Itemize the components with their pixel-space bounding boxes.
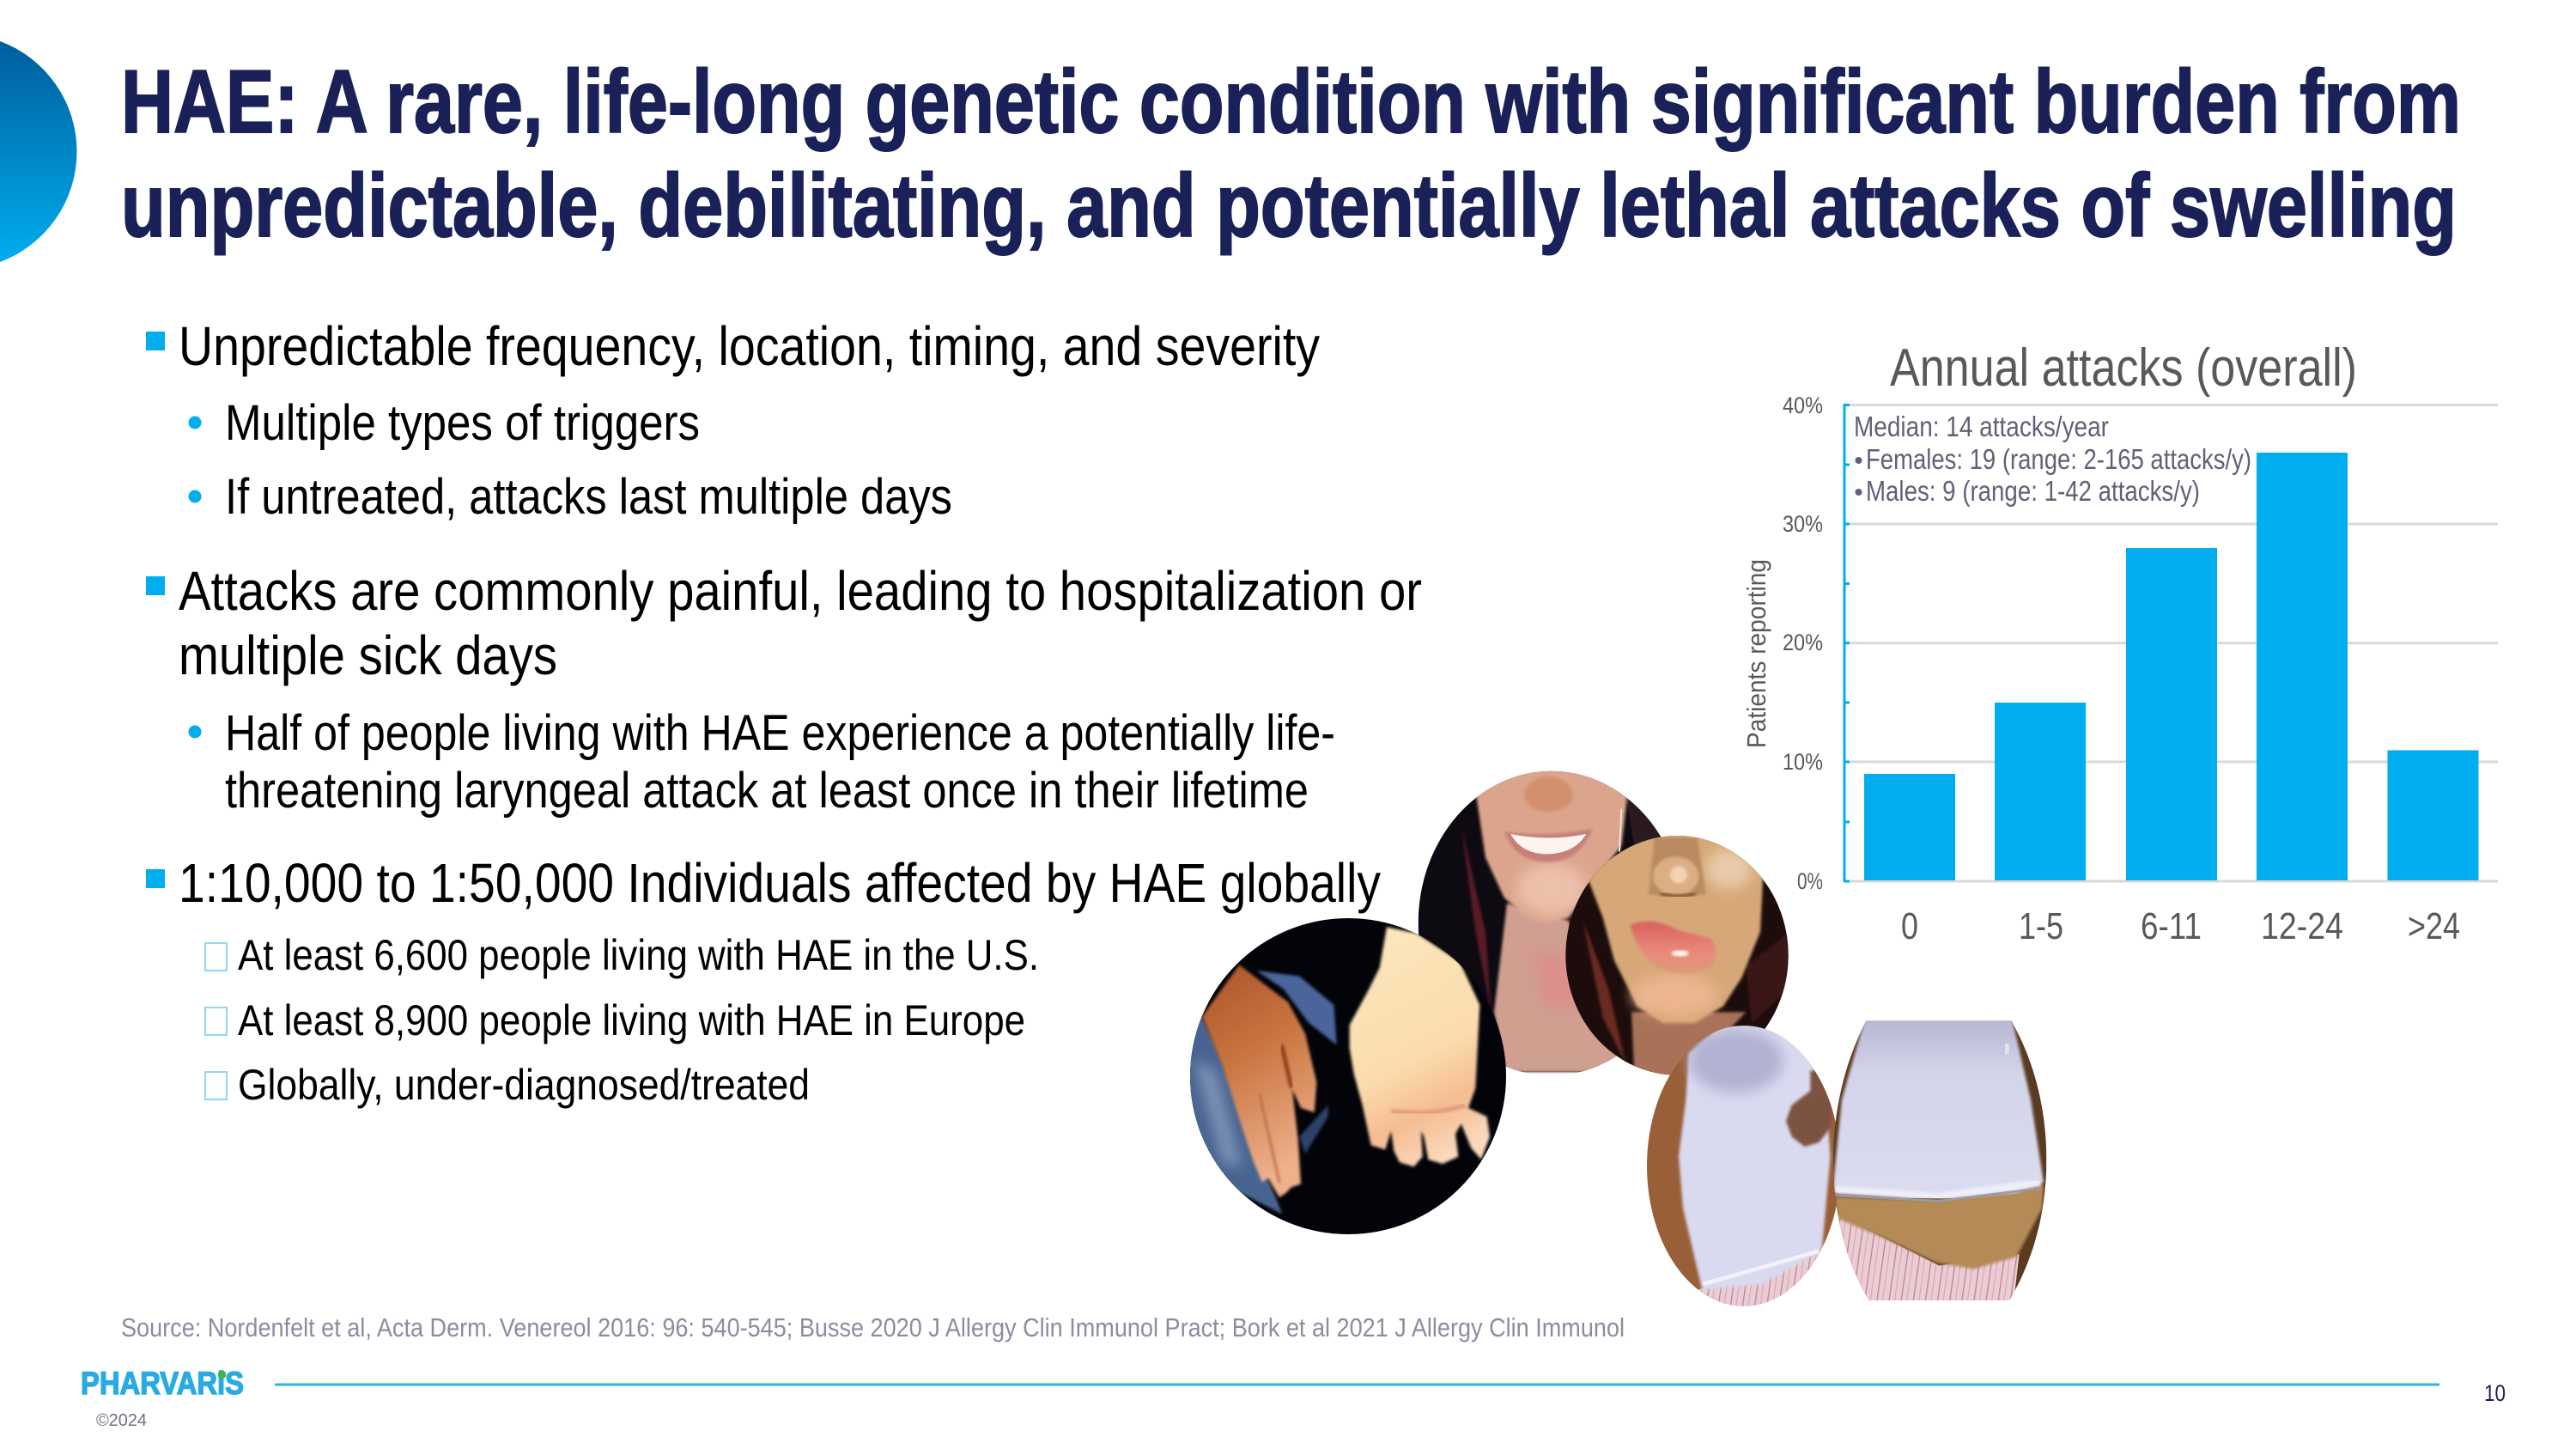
photo: smiling face: [1419, 771, 1661, 1074]
photo: swollen lip: [1563, 831, 1792, 1078]
page number: 10: [2484, 1380, 2506, 1406]
y tick labels: 10%: [1783, 749, 1823, 775]
bar chart: annual attacks: [1741, 338, 2498, 947]
title: [121, 52, 2461, 256]
bullet group: unpredictability: [146, 315, 1320, 525]
photo: swollen hand: [1185, 916, 1509, 1237]
bullet group: painful attacks: multiple sick days: [179, 624, 557, 686]
footer: [81, 1366, 2506, 1430]
x labels: 6-11: [2141, 905, 2202, 947]
y tick labels: 0%: [1797, 868, 1823, 894]
photo: abdominal swelling, side view: [1644, 1022, 1844, 1308]
x labels: [1901, 905, 2460, 947]
inset note: median attacks: Males: 9 (range: 1-42 attacks/y): [1866, 475, 2200, 507]
bullet group: prevalence: At least 6,600 people living with HAE in the U.S.: [238, 931, 1039, 979]
y axis: [1844, 404, 1850, 882]
x labels: 1-5: [2019, 905, 2063, 947]
y axis title: Patients reporting: [1741, 559, 1771, 748]
copyright: ©2024: [96, 1411, 147, 1430]
y tick labels: 40%: [1783, 393, 1823, 418]
decorative arc: blue gradient half circle: [0, 41, 76, 262]
bullet group: prevalence: Globally, under-diagnosed/treated: [238, 1061, 810, 1109]
inset note: median attacks: Median: 14 attacks/year: [1854, 411, 2109, 442]
bullet group: painful attacks: Half of people living with HAE experience a potentially life-: [225, 705, 1335, 761]
x labels: >24: [2408, 905, 2460, 947]
bullet group: painful attacks: [146, 560, 1422, 819]
bullet group: painful attacks: Attacks are commonly painful, leading to hospitalization or: [179, 560, 1422, 622]
x labels: 12-24: [2261, 905, 2343, 947]
y tick labels: [1783, 393, 1823, 894]
panel: key points bullet list: [146, 315, 1422, 1109]
logo: Pharvaris: PHARVARiS: [81, 1366, 244, 1401]
bullet group: unpredictability: Unpredictable frequency, location, timing, and severity: [179, 315, 1320, 377]
photo: abdominal swelling, front view: [1831, 1020, 2050, 1303]
inset note: median attacks: Females: 19 (range: 2-165 attacks/y): [1866, 443, 2251, 475]
bullet group: unpredictability: Multiple types of triggers: [225, 395, 700, 451]
bullet group: prevalence: 1:10,000 to 1:50,000 Individuals affected by HAE globally: [179, 852, 1381, 914]
bullet group: prevalence: [146, 852, 1381, 1109]
bullet group: prevalence: At least 8,900 people living with HAE in Europe: [238, 996, 1025, 1044]
y tick labels: 30%: [1783, 511, 1823, 537]
x labels: 0: [1901, 905, 1918, 947]
y tick labels: 20%: [1783, 630, 1823, 655]
source citation: Source: Nordenfelt et al, Acta Derm. Venereol 2016: 96: 540-545; Busse 2020 J Allergy Clin Immunol Pract; Bork et al 2021 J Allergy Clin Immunol: [121, 1312, 1625, 1342]
chart title: Annual attacks (overall): [1890, 338, 2357, 398]
bullet group: unpredictability: If untreated, attacks last multiple days: [225, 469, 952, 525]
inset note: median attacks: [1854, 411, 2251, 507]
bars: [1864, 453, 2478, 880]
bullet group: painful attacks: threatening laryngeal attack at least once in their lifetime: [225, 763, 1309, 819]
